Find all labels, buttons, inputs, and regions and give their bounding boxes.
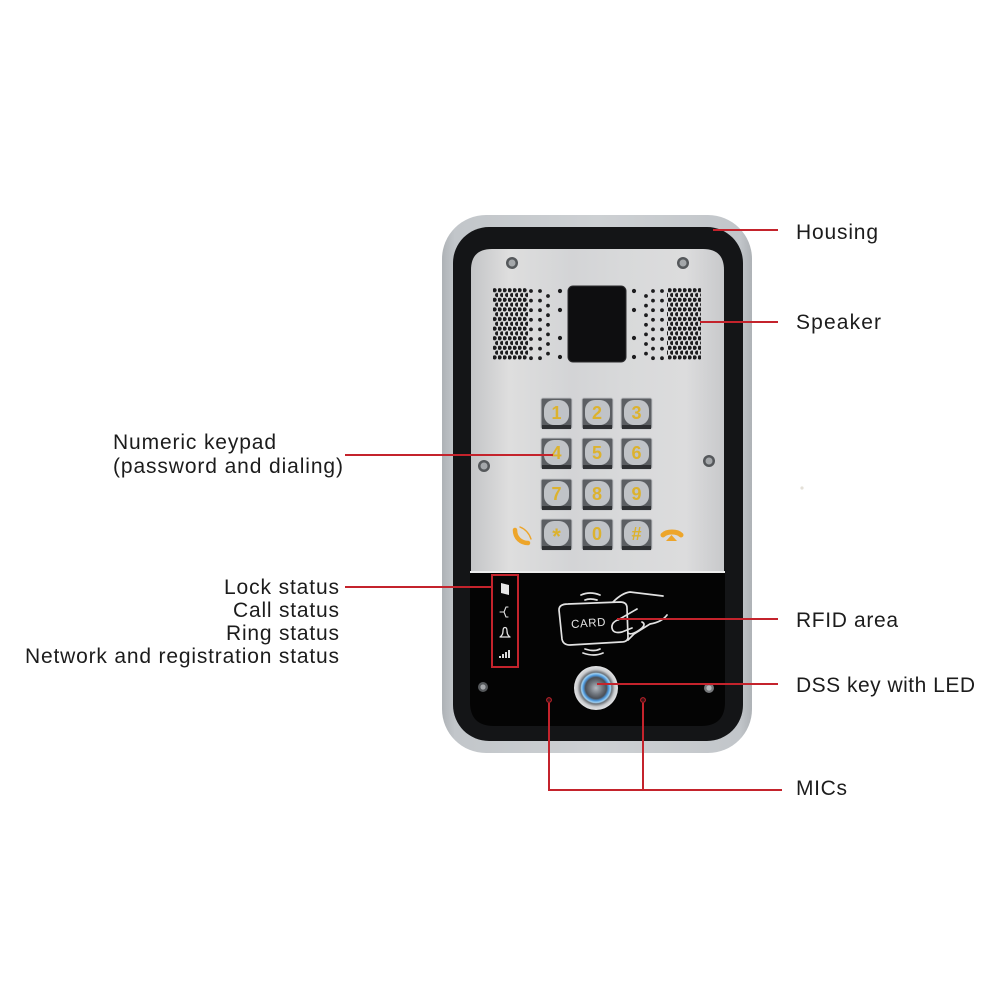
speaker left grille [493,288,562,361]
icon: RFID card and hand: CARD [571,617,606,631]
icon: bell [500,628,510,637]
DSS button [574,666,618,710]
label: RFID area: RFID area [796,609,898,632]
icon: call handset [515,527,531,543]
microphone holes [547,698,645,702]
numeric keypad: 3 [631,403,642,423]
icon: RFID card and hand [559,592,667,655]
icon: lock [501,583,509,595]
smudge on white background [800,486,804,490]
label: MICs: MICs [796,777,847,800]
label: DSS key with LED: DSS key with LED [796,674,975,697]
lower black panel [470,573,725,726]
label: Call status: Call status [233,599,339,622]
status icons [499,583,510,658]
plate edge [470,571,725,573]
housing [442,215,752,753]
black bezel [453,227,743,741]
numeric keypad: 4 [551,443,562,463]
label: Speaker: Speaker [796,311,881,334]
speaker right grille [632,288,701,361]
numeric keypad: 2 [592,403,602,423]
camera window [568,286,626,362]
icon: call [500,607,508,617]
numeric keypad: 7 [551,484,562,504]
numeric keypad: 0 [592,524,602,544]
label: Numeric keypad: Numeric keypad [113,431,276,454]
icon: signal [499,650,510,658]
numeric keypad: 6 [631,443,642,463]
numeric keypad: 5 [592,443,602,463]
numeric keypad [541,398,652,550]
icon: hang up handset [663,532,681,541]
label: Lock status: Lock status [224,576,339,599]
numeric keypad: 1 [551,403,562,423]
numeric keypad: * [552,524,561,549]
leader lines [345,230,782,790]
screws [478,257,715,693]
label: Ring status: Ring status [226,622,339,645]
numeric keypad: # [631,524,642,544]
label: Network and registration status: Network and registration status [25,645,339,668]
label: Housing: Housing [796,221,878,244]
numeric keypad: 8 [592,484,602,504]
steel faceplate [471,249,724,572]
label: password and dialing: (password and dialing) [113,455,343,478]
numeric keypad: 9 [631,484,642,504]
device: door phone [442,215,804,753]
